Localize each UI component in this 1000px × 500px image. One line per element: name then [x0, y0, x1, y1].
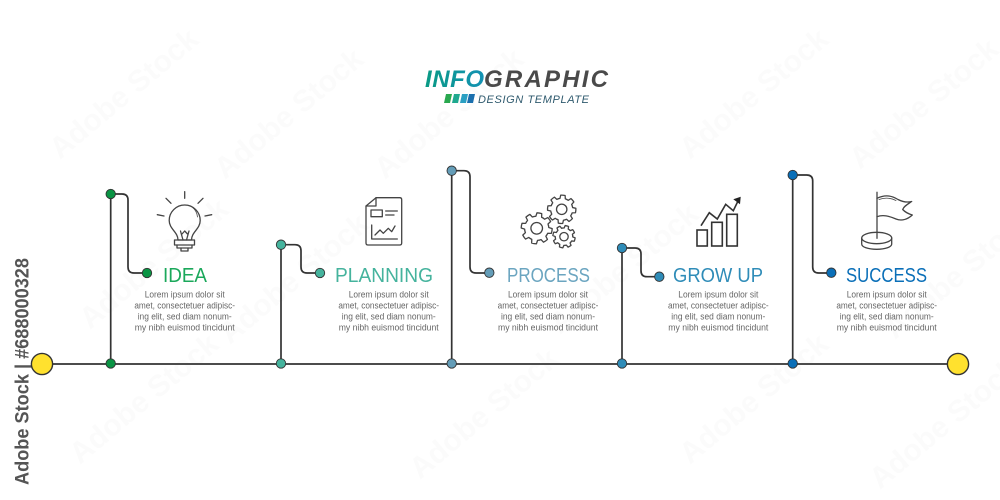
title: GRAPHIC	[484, 66, 609, 93]
watermark pattern: Adobe Stock	[73, 192, 235, 335]
title: INFO	[425, 66, 484, 93]
text block: process: my nibh euismod tincidunt	[498, 322, 598, 332]
watermark pattern: Adobe Stock	[43, 22, 205, 165]
step 4: grow up	[617, 197, 769, 368]
text block: success: ing elit, sed diam nonum-	[840, 312, 934, 322]
text block: idea: ing elit, sed diam nonum-	[138, 312, 232, 322]
text block: grow up: my nibh euismod tincidunt	[668, 322, 769, 332]
connector: process	[447, 166, 494, 368]
text block: process: ing elit, sed diam nonum-	[501, 312, 595, 322]
icon: flag on base	[862, 192, 912, 249]
text block: grow up	[668, 290, 769, 332]
heading: planning: PLANNING	[335, 265, 433, 287]
heading: success: SUCCESS	[846, 265, 927, 287]
watermark pattern: Adobe Stock	[673, 327, 835, 470]
step 3: process	[447, 166, 598, 368]
text block: success	[836, 290, 937, 332]
icon: gears	[519, 194, 578, 250]
text block: idea: amet, consectetuer adipisc-	[134, 300, 235, 310]
step 2: planning	[276, 198, 439, 368]
side credit text: Adobe Stock | #688000328	[12, 258, 34, 485]
text block: grow up: Lorem ipsum dolor sit	[678, 290, 759, 300]
watermark pattern: Adobe Stock	[543, 197, 705, 340]
subtitle with colour bars: DESIGN TEMPLATE	[478, 94, 590, 106]
icon: rising bar chart	[697, 197, 741, 246]
text block: grow up: amet, consectetuer adipisc-	[668, 300, 769, 310]
text block: success: amet, consectetuer adipisc-	[836, 300, 937, 310]
heading: grow up: GROW UP	[673, 265, 763, 287]
watermark pattern: Adobe Stock	[368, 42, 530, 185]
heading: idea: IDEA	[163, 265, 208, 287]
text block: planning	[338, 290, 439, 332]
text block: success: my nibh euismod tincidunt	[837, 322, 937, 332]
text block: grow up: ing elit, sed diam nonum-	[671, 312, 765, 322]
watermark pattern: Adobe Stock	[213, 207, 375, 350]
watermark pattern: Adobe Stock	[63, 327, 225, 470]
connector: planning	[276, 240, 325, 368]
text block: planning: Lorem ipsum dolor sit	[349, 290, 429, 300]
text block: planning: ing elit, sed diam nonum-	[342, 312, 436, 322]
watermark pattern: Adobe Stock	[673, 22, 835, 165]
step 1: idea	[106, 189, 235, 368]
text block: process: Lorem ipsum dolor sit	[508, 290, 588, 300]
connector: idea	[106, 189, 152, 368]
text block: idea	[134, 290, 235, 332]
icon: light bulb	[157, 192, 212, 251]
text block: idea: my nibh euismod tincidunt	[135, 322, 235, 332]
watermark pattern: Adobe Stock	[403, 342, 565, 485]
connector: success	[788, 170, 836, 368]
text block: planning: amet, consectetuer adipisc-	[338, 300, 439, 310]
timeline start marker	[31, 353, 53, 375]
text block: success: Lorem ipsum dolor sit	[847, 290, 927, 300]
heading: process: PROCESS	[507, 265, 590, 287]
timeline baseline	[42, 363, 958, 365]
watermark pattern: Adobe Stock	[208, 42, 370, 185]
text block: process: amet, consectetuer adipisc-	[498, 300, 598, 310]
title	[425, 66, 609, 93]
text block: process	[498, 290, 598, 332]
step 5: success	[788, 170, 937, 368]
icon: document with chart	[366, 198, 402, 245]
text block: idea: Lorem ipsum dolor sit	[145, 290, 225, 300]
text block: planning: my nibh euismod tincidunt	[339, 322, 439, 332]
timeline end marker	[947, 353, 969, 375]
connector: grow up	[617, 243, 664, 368]
